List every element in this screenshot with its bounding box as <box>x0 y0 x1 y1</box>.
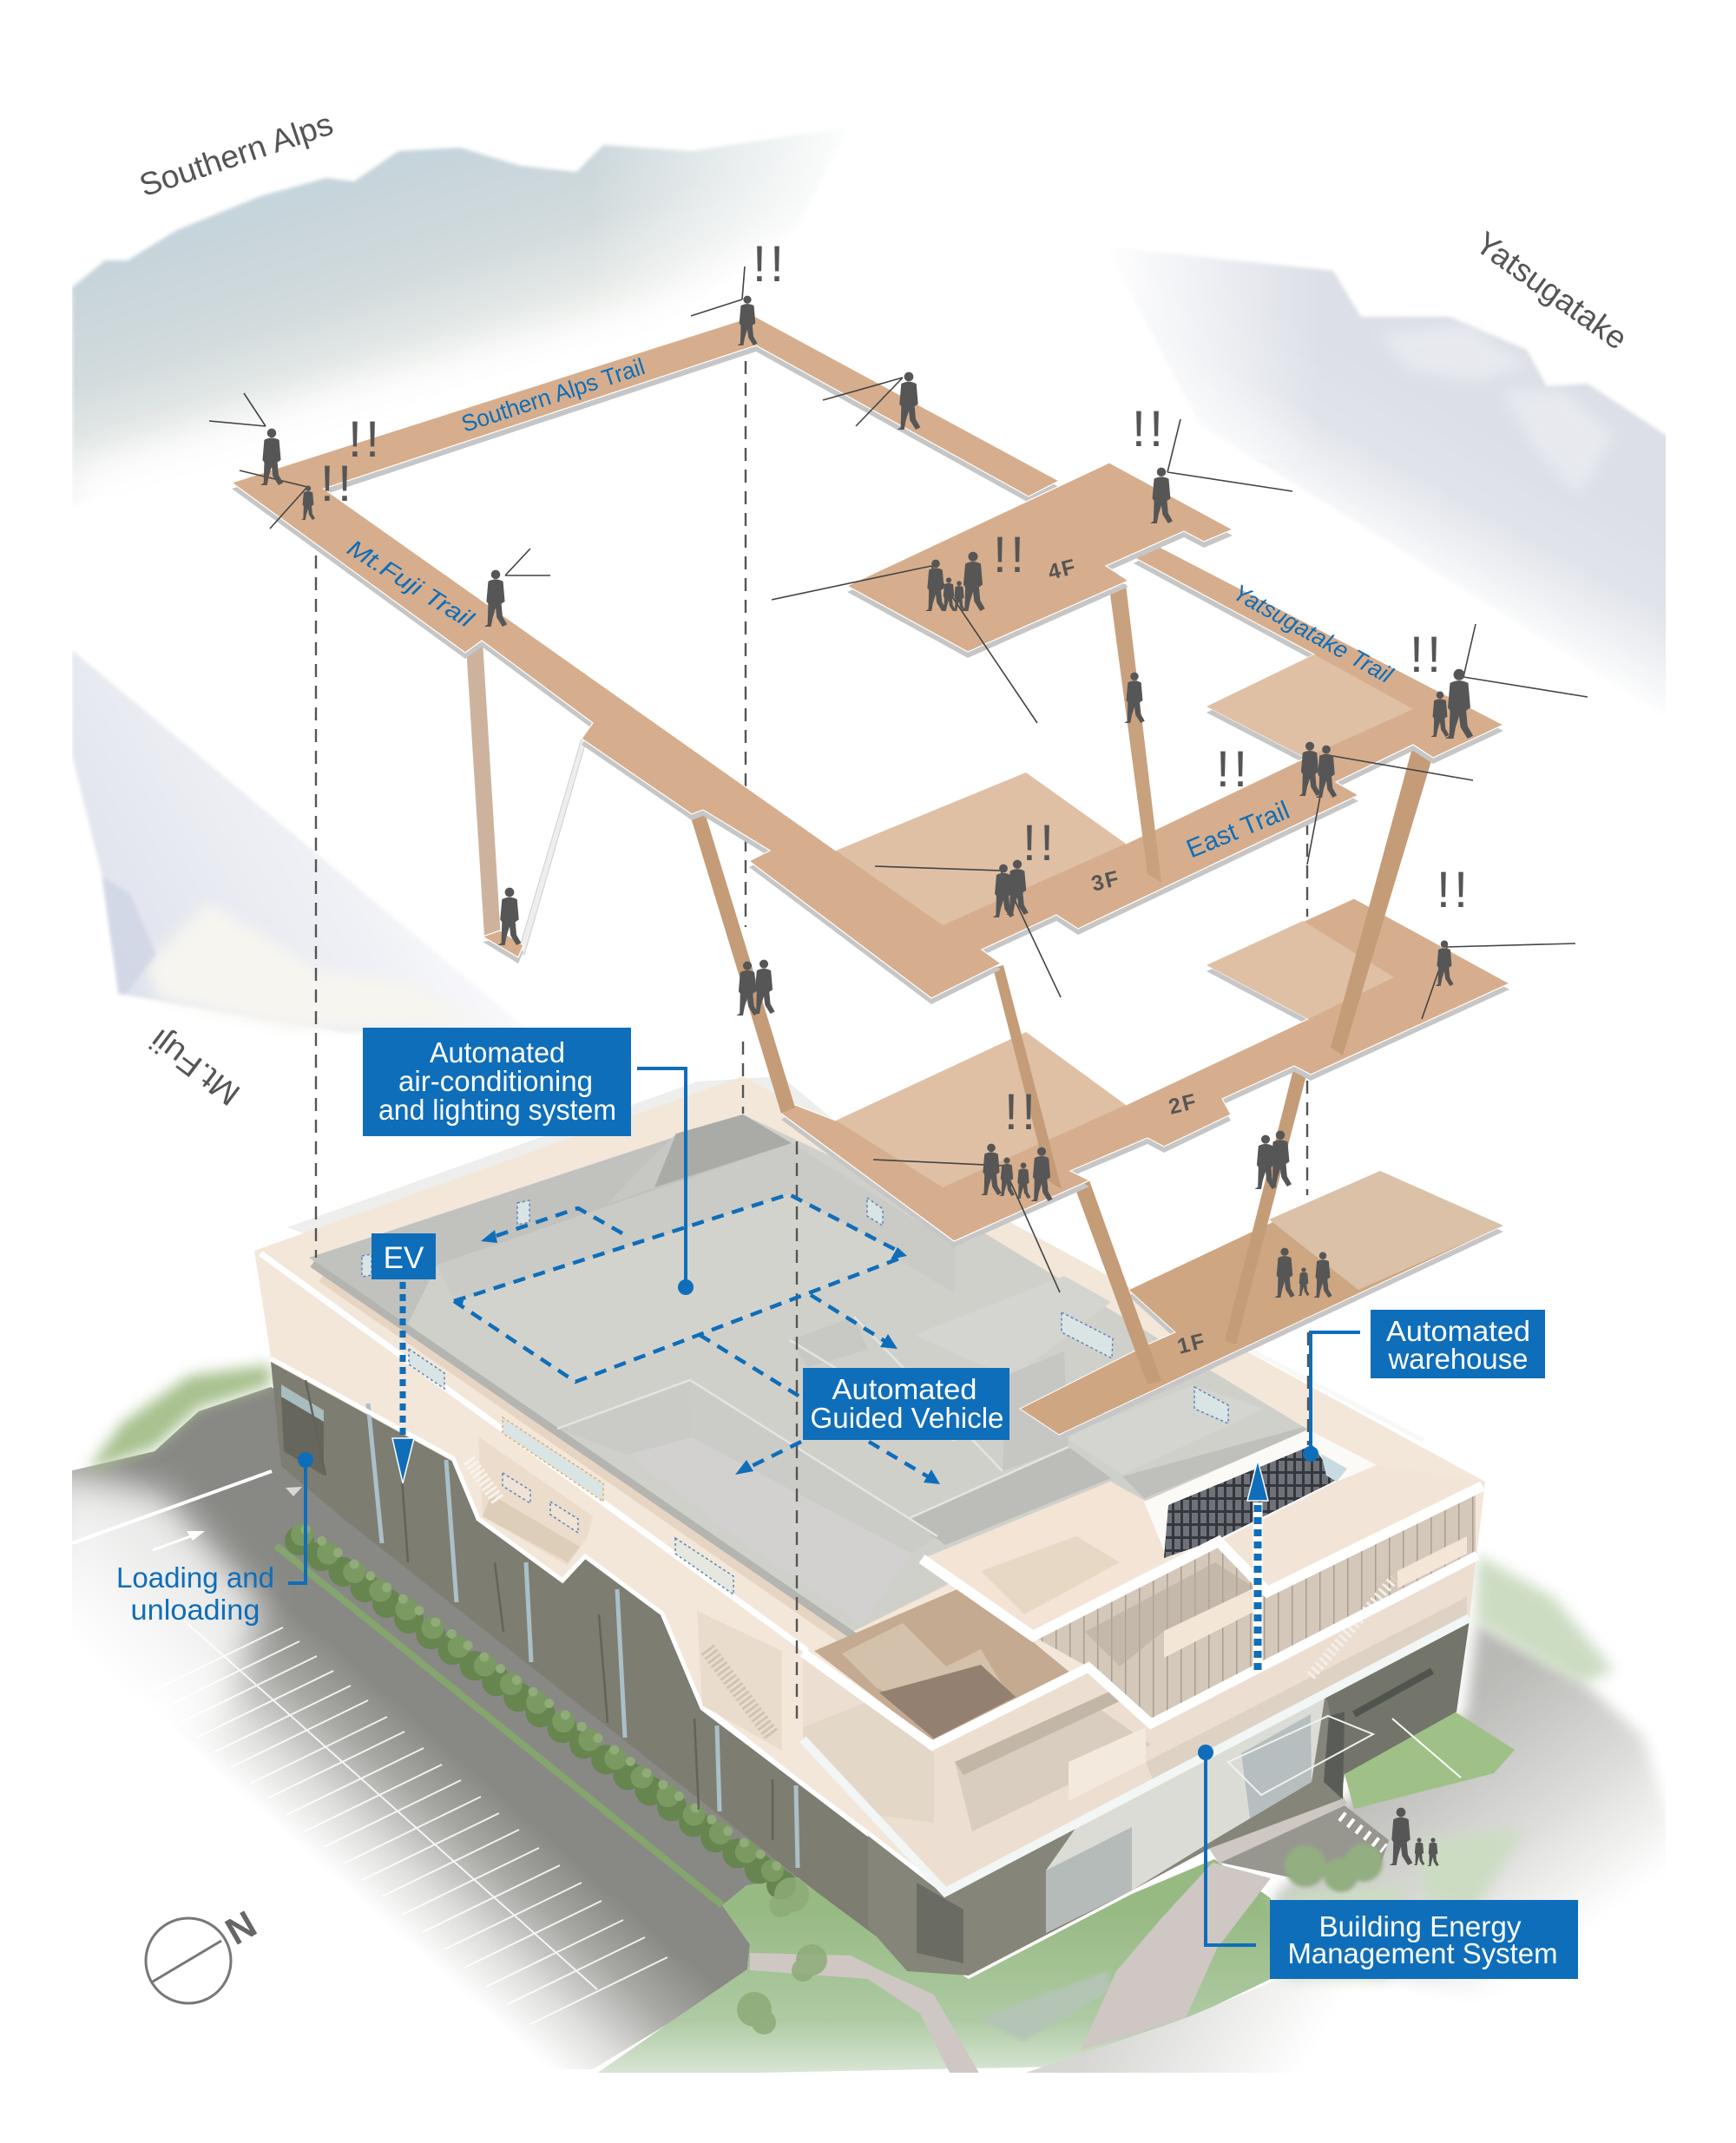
building: meeting terrace left <box>803 1701 934 1823</box>
building: roof interior <box>309 1114 1308 1634</box>
building: cafe terrace <box>814 1586 1071 1743</box>
column: 3F to 2F right <box>1331 745 1433 1055</box>
place label: Southern Alps: Southern Alps <box>135 106 338 203</box>
building: mid floor <box>803 1559 1476 1896</box>
callout: Building Energy Management System: Management System <box>1288 1937 1557 1969</box>
ground: crosswalk <box>1341 1816 1384 1849</box>
sightlines <box>209 266 1588 1292</box>
ground: entrance lawn <box>1345 1712 1515 1809</box>
exclamation marks: !! <box>1437 862 1471 918</box>
building: corner stair door <box>917 1883 963 1963</box>
place label: Mt.Fuji: Mt.Fuji <box>143 1022 247 1113</box>
callout: automated air-conditioning: and lighting system <box>378 1094 616 1126</box>
callout: Automated warehouse: warehouse <box>1388 1343 1528 1375</box>
building: parapet tone band <box>323 1276 855 1645</box>
mountain: Yatsugatake <box>1154 254 1666 693</box>
column: 2F to 1F right <box>1225 1066 1307 1344</box>
floor labels <box>1046 555 1209 1359</box>
callout: Automated Guided Vehicle <box>803 1368 1009 1440</box>
ground: forecourt trees <box>1285 1844 1383 1892</box>
AGV dashed routes <box>454 1194 940 1484</box>
building: automated warehouse racks <box>1164 1445 1337 1558</box>
ground: parking lot and service road <box>72 1387 799 2069</box>
trail names <box>343 353 1397 864</box>
label: EV <box>372 1233 436 1279</box>
callout: Loading and unloading: unloading <box>130 1594 260 1626</box>
warehouse up arrow <box>1247 1460 1268 1670</box>
ground: lawn trees <box>737 1877 827 2035</box>
ground: garden pond <box>980 1971 1108 2041</box>
callout: automated air-conditioning: air-conditioning <box>398 1065 593 1097</box>
floor labels: 3F <box>1089 866 1123 897</box>
building: ground floor glazing <box>1046 1693 1325 1933</box>
building <box>254 1076 1485 1975</box>
callout: Automated warehouse <box>1303 1310 1545 1462</box>
people silhouettes <box>260 296 1473 1866</box>
ground: right driveway <box>1271 1621 1671 1996</box>
exclamation marks: !! <box>1216 741 1251 798</box>
mountain: Mt.Fuji <box>72 650 526 1033</box>
exclamation marks: !! <box>1023 815 1057 871</box>
column: 3F to 2F left <box>691 810 795 1114</box>
building: fire stair <box>1311 1579 1394 1676</box>
building: interior wall highlights <box>557 1317 1069 1536</box>
ground: front lawn <box>593 1859 1271 2076</box>
floor 1F slab <box>1020 1171 1503 1441</box>
exclamation marks: !! <box>753 236 787 293</box>
building: white leader line <box>1392 1719 1461 1778</box>
building: entrance dark wall <box>1325 1620 1470 1774</box>
exclamation marks <box>320 236 1471 1141</box>
trail names: Southern Alps Trail <box>458 353 648 437</box>
callout: automated air-conditioning <box>363 1028 694 1295</box>
floor labels: 2F <box>1167 1089 1200 1120</box>
building: entrance canopy <box>1228 1716 1373 1795</box>
building: wall column lines <box>306 1380 773 1840</box>
EV arrow <box>392 1282 414 1483</box>
building: white floor edges <box>803 1486 1483 1892</box>
building: white edge left <box>260 1253 807 1651</box>
trail names: Mt.Fuji Trail <box>343 535 479 633</box>
building: wall slot window <box>1354 1671 1432 1714</box>
floor labels: 4F <box>1046 555 1080 585</box>
callout: automated air-conditioning: Automated <box>430 1036 565 1068</box>
building: roof windows <box>362 1198 1228 1594</box>
floor 3F and ridge trail slab <box>232 316 1503 1004</box>
column: 4F to 3F <box>1109 584 1161 883</box>
callout: Automated Guided Vehicle: Guided Vehicle <box>811 1402 1003 1434</box>
hedge <box>276 1529 792 1905</box>
ground: gray forecourt <box>1220 1805 1389 1878</box>
floor labels: 1F <box>1175 1329 1209 1359</box>
building: side rooms <box>790 1276 1308 1545</box>
building: parapet inner hatch <box>312 1264 858 1639</box>
dashed drop lines <box>316 361 1308 1726</box>
exclamation marks: !! <box>1132 401 1167 457</box>
ground: upper-left lawn <box>87 1364 271 1471</box>
building: warehouse recess <box>1144 1430 1377 1557</box>
trail names: East Trail <box>1182 796 1293 864</box>
building: interior rear wall <box>437 1143 792 1302</box>
building: upper glass curtain wall <box>1033 1491 1476 1724</box>
building: facade white outline <box>271 1358 943 1890</box>
ground: walking paths <box>750 1788 1347 2076</box>
ground: right pale lawn and trees <box>1285 1555 1614 1979</box>
compass <box>146 1903 264 2003</box>
exclamation marks: !! <box>993 527 1028 583</box>
building: rear white edge right <box>1250 1350 1424 1441</box>
floor 4F slab <box>847 463 1233 658</box>
callout: Automated Guided Vehicle: Automated <box>832 1373 977 1405</box>
exclamation marks: !! <box>320 456 355 512</box>
building: top volume <box>922 1482 1167 1636</box>
callout: Automated warehouse: Automated <box>1386 1315 1530 1347</box>
mountain: Southern Alps <box>72 135 816 491</box>
place label: Yatsugatake: Yatsugatake <box>1469 225 1634 357</box>
building: interior rear roof <box>309 1114 792 1324</box>
building: notch stair recess one <box>469 1436 593 1566</box>
building: wall window slits <box>368 1403 798 1868</box>
column: 2F to 1F left <box>1075 1180 1161 1384</box>
building: notch stair recess two <box>697 1611 782 1751</box>
building: roof parapet <box>254 1076 1485 1892</box>
building: large room floor <box>454 1194 907 1382</box>
building: front lower wall base <box>868 1618 1470 1975</box>
building: left dark wall <box>271 1362 969 1975</box>
building: warehouse roof right <box>1219 1465 1485 1592</box>
label: EV: EV <box>384 1241 424 1275</box>
building: rear rim <box>287 1076 833 1250</box>
exclamation marks: !! <box>1410 627 1444 683</box>
callout: Building Energy Management System <box>1198 1745 1578 1979</box>
trail names: Yatsugatake Trail <box>1228 579 1397 688</box>
floor 2F slab <box>781 898 1509 1247</box>
callout: Building Energy Management System: Building Energy <box>1319 1910 1522 1943</box>
callout: Loading and unloading <box>116 1452 313 1626</box>
ground: pale lower road <box>1026 1979 1307 2073</box>
compass: N <box>219 1903 264 1954</box>
building: loading door <box>281 1397 324 1476</box>
callout: Loading and unloading: Loading and <box>116 1561 274 1594</box>
exclamation marks: !! <box>348 411 383 468</box>
Mt.Fuji hanging stair and landing <box>466 641 587 963</box>
column: 3F to 2F centre <box>993 965 1062 1189</box>
exclamation marks: !! <box>1004 1084 1039 1141</box>
building: lower room walls and floor <box>557 1380 937 1626</box>
